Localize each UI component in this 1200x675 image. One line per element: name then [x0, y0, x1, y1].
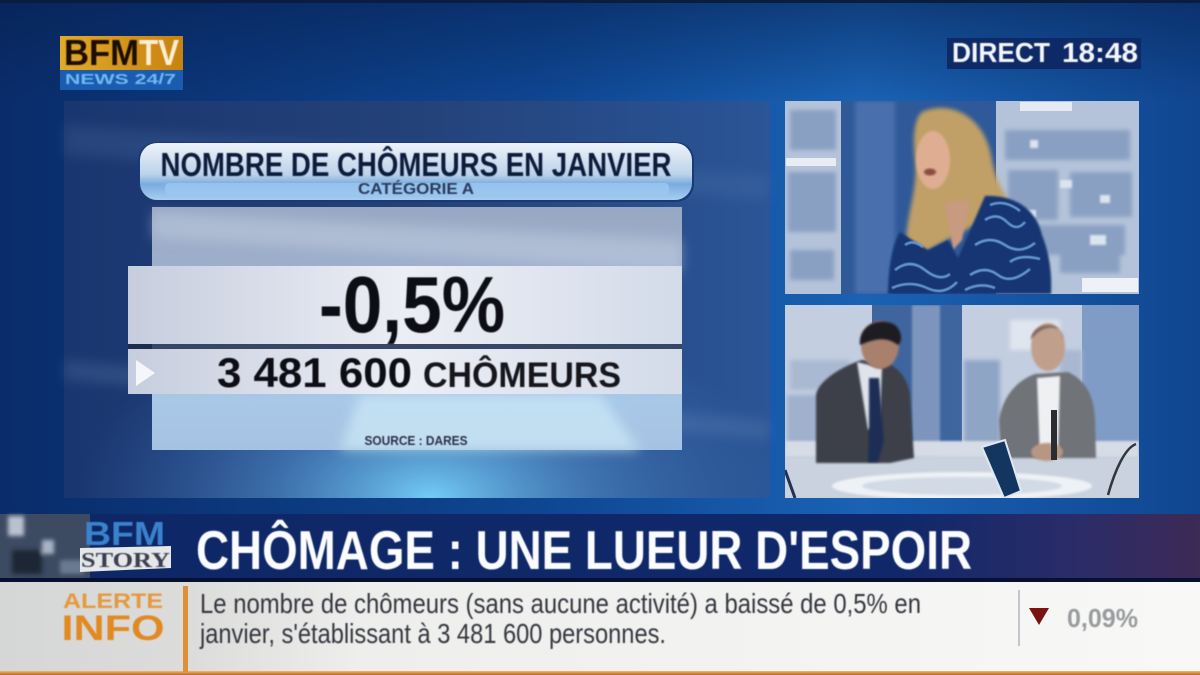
logo: BFM Story: BFM: [84, 515, 165, 552]
logo: BFMTV News 24/7: NEWS 24/7: [65, 71, 176, 88]
tablet: [982, 440, 1021, 498]
jacket: [888, 196, 1051, 294]
alert message: Le nombre de chômeurs (sans aucune activité) a baissé de 0,5% en: [200, 588, 921, 619]
logo: BFMTV News 24/7: TV: [139, 32, 179, 73]
live clock: 18:48: [1062, 37, 1138, 68]
band: unemployed count: CHÔMEURS: [423, 355, 621, 395]
video: presenter: [785, 101, 1139, 294]
logo: BFM Story: STORY: [81, 548, 170, 572]
icon: down triangle: [1029, 608, 1049, 625]
band: percentage: -0,5%: [319, 260, 505, 349]
band: unemployed count: [128, 349, 682, 396]
band: unemployed count: 3 481 600: [217, 349, 412, 396]
alert label: ALERTE: [63, 590, 163, 613]
thumbnail: [0, 514, 90, 578]
live clock: DIRECT: [952, 37, 1050, 68]
title pill: [138, 142, 694, 202]
market index: [1029, 603, 1138, 633]
guest left: [816, 321, 914, 463]
headline text: CHÔMAGE : UNE LUEUR D'ESPOIR: [196, 519, 972, 581]
guest right: [999, 323, 1096, 461]
live clock: [947, 37, 1141, 69]
face: [916, 131, 950, 189]
hair: [906, 108, 1010, 252]
alert label: INFO: [62, 609, 164, 648]
source: SOURCE : DARES: [364, 434, 468, 448]
alert message: janvier, s'établissant à 3 481 600 personnes.: [199, 618, 666, 649]
alert bar: [0, 582, 1200, 675]
logo: BFM Story: [80, 515, 171, 572]
headline bar: [0, 514, 1200, 582]
video: guests: [785, 305, 1139, 500]
alert message: [199, 588, 921, 649]
desk: [785, 441, 1139, 500]
panel: unemployment graphic: [64, 101, 770, 498]
data panel backing: [152, 207, 682, 450]
title text: NOMBRE DE CHÔMEURS EN JANVIER: [160, 145, 672, 183]
band: percentage: [128, 260, 682, 349]
logo: BFMTV News 24/7: BFM: [64, 32, 139, 73]
icon: play arrow: [136, 360, 155, 386]
subtitle text: CATÉGORIE A: [358, 179, 474, 198]
market index: 0,09%: [1067, 603, 1138, 633]
alert label: [62, 590, 164, 648]
logo: BFMTV News 24/7: [60, 32, 183, 90]
microphones: [785, 444, 1136, 498]
